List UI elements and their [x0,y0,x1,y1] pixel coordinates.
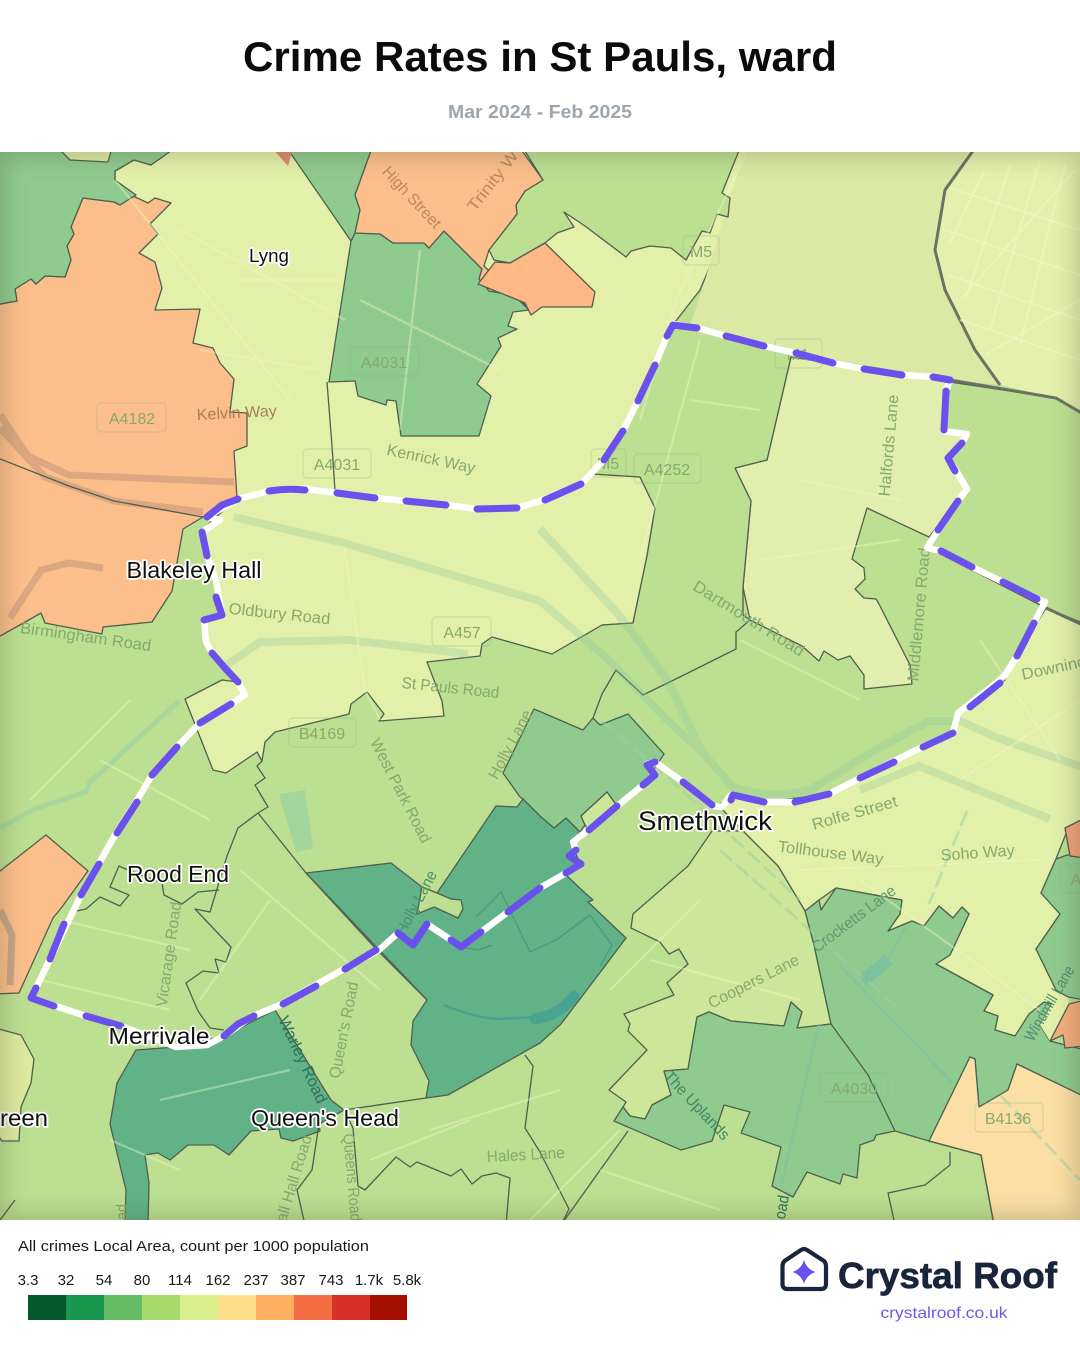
legend scale numbers: 1.7k [355,1272,384,1289]
title: Crime Rates in St Pauls, ward [243,33,837,80]
railway line [0,457,203,517]
road name labels: Queens Road [339,1133,364,1222]
ward: east of Smethwick low-crime area [718,608,1080,1041]
purple dashes [31,325,1037,1036]
place labels: Lyng [249,246,289,266]
place labels: Blakeley Hall [126,557,262,583]
ward: orange south of High Street [478,243,595,315]
legend scale numbers: 114 [168,1272,192,1289]
legend scale numbers: 80 [134,1272,150,1289]
legend scale numbers: 5.8k [393,1272,422,1289]
legend scale numbers: 743 [318,1272,344,1289]
website url: crystalroof.co.uk [880,1305,1009,1322]
Crocketts pond [859,955,893,986]
ward: Halfords Lane low-crime area [735,357,966,689]
mid green fill: Oldbury south-centre [596,356,791,626]
ward boundary: Oldbury west edge [592,474,655,625]
Park pond [279,790,313,852]
ward: top strip green [291,152,370,242]
canal west [0,701,179,828]
road name labels: ad [114,1204,131,1220]
legend scale numbers: 32 [58,1272,74,1289]
road shield labels: A4252 [644,462,690,479]
ward: Windmill Lane orange tip [1050,1000,1080,1048]
legend scale numbers: 162 [205,1272,231,1289]
choropleth map [0,147,1080,1225]
road shield labels: A457 [443,625,481,642]
road name labels: Soho Way [940,842,1015,865]
road name labels: Queen's Road [327,980,362,1080]
legend scale numbers: 54 [96,1272,112,1289]
road name labels: Crocketts Lane [809,882,899,956]
light patch beside Holly Lane ward [581,792,617,830]
legend colour swatches [28,1295,407,1320]
road name labels: Middlemore Road [905,547,934,682]
ward: north and central low-crime area [115,148,760,773]
logo wordmark: Crystal Roof [838,1255,1058,1296]
legend scale numbers [18,1272,422,1289]
ward: Coopers Lane lighter green [609,831,831,1119]
road shield labels: A4031 [361,355,407,372]
notch in central dark green [417,887,463,918]
ward: north-west green [0,148,175,305]
road shield labels: A4030 [831,1081,877,1098]
road name labels: High Street [378,164,444,233]
legend [18,1238,422,1320]
brooks [781,928,953,1186]
ward: red tip [276,152,292,166]
ward: orange west high-crime area [0,196,247,639]
road name labels: Holly Lane [393,868,441,938]
road name labels: Birmingham Road [19,620,152,655]
road name labels: Halfords Lane [877,394,902,497]
road name labels: West Park Road [366,736,434,846]
road name labels: Trinity W [465,147,523,215]
inner dark green outline [461,892,612,966]
road shield labels: B4136 [985,1111,1031,1128]
road name labels: Coopers Lane [706,952,802,1012]
road network [30,153,1080,1220]
legend title: All crimes Local Area, count per 1000 population [18,1238,369,1255]
road name labels: Kelvin Way [196,403,277,424]
legend scale numbers: 237 [243,1272,269,1289]
ward: Crocketts and Uplands green [614,888,1080,1197]
road name labels: The Uplands [660,1068,733,1144]
ward: High Street orange [355,148,543,310]
road name labels [19,147,1080,1224]
road name labels: Hales Lane [486,1145,565,1166]
ward: far-east green strip [1036,855,1080,1000]
place labels: reen [0,1105,48,1131]
road shield labels: M1 [787,347,809,364]
thin boundary A4031 [327,382,335,491]
road grid east estate [945,160,1080,360]
ward: north centre mid green [489,148,740,263]
road shield labels: A4031 [314,457,360,474]
road name labels: oad [772,1194,793,1221]
ward: B4136 peach [929,1057,1080,1225]
road name labels: St Pauls Road [401,675,500,702]
reservoir in central dark green [444,996,574,1019]
ward: Windmill Lane light pocket [1040,997,1069,1041]
ward: A4031 north green [329,231,529,436]
ward boundary lines south and west [0,761,994,1225]
place labels: Smethwick [638,806,773,836]
ward: central dark green [306,799,626,1098]
motorway bands [224,517,1080,819]
ward: far-west light patch [0,1028,34,1141]
road name labels: Kenrick Way [385,442,477,477]
thick boundary east [935,148,1080,626]
dashed rail line [600,720,1080,1180]
small light patch top-left [61,152,112,163]
motorway in south-west orange [0,910,12,985]
road name labels: Vicarage Road [154,901,185,1008]
ward: east side mid green [938,382,1046,608]
road shield labels: M5 [597,456,619,473]
subtitle: date range: Mar 2024 - Feb 2025 [448,102,632,122]
road name labels: Oldbury Road [228,601,331,628]
place labels [0,246,773,1131]
road name labels: Rolfe Street [810,793,900,834]
ward: Holly Lane green [503,709,664,832]
road name labels: all Hall Road [273,1133,316,1224]
logo: Crystal Roof [782,1249,1058,1322]
ward: Birmingham Road south-west orange [0,835,88,994]
motorway through orange area [0,415,234,618]
legend scale numbers: 3.3 [18,1272,38,1289]
road shield labels: B4169 [299,726,345,743]
icon: house with star [782,1249,826,1289]
legend scale numbers: 387 [280,1272,306,1289]
place labels: Rood End [127,861,229,887]
white boundary underlay [31,324,1045,1047]
place labels: Queen's Head [251,1105,399,1131]
ward boundary route: St Pauls [31,324,1045,1047]
ward: Queen's Head dark green [110,1010,344,1225]
road name labels: Warley Road [275,1014,330,1106]
road name labels: Dartmouth Road [690,578,807,660]
road shield labels: A4182 [109,411,155,428]
ward: far-east orange tip [1065,818,1080,858]
ward: north-east farmland [690,148,1000,385]
road shield labels [97,236,1080,1132]
ward: east grid estate [935,148,1080,412]
ward boundary: Oldbury east edge [593,357,791,718]
place labels: Merrivale [108,1023,210,1049]
road name labels: Holly Lane [486,707,536,782]
road name labels: Tollhouse Way [777,839,884,868]
road shield labels: M5 [690,244,712,261]
